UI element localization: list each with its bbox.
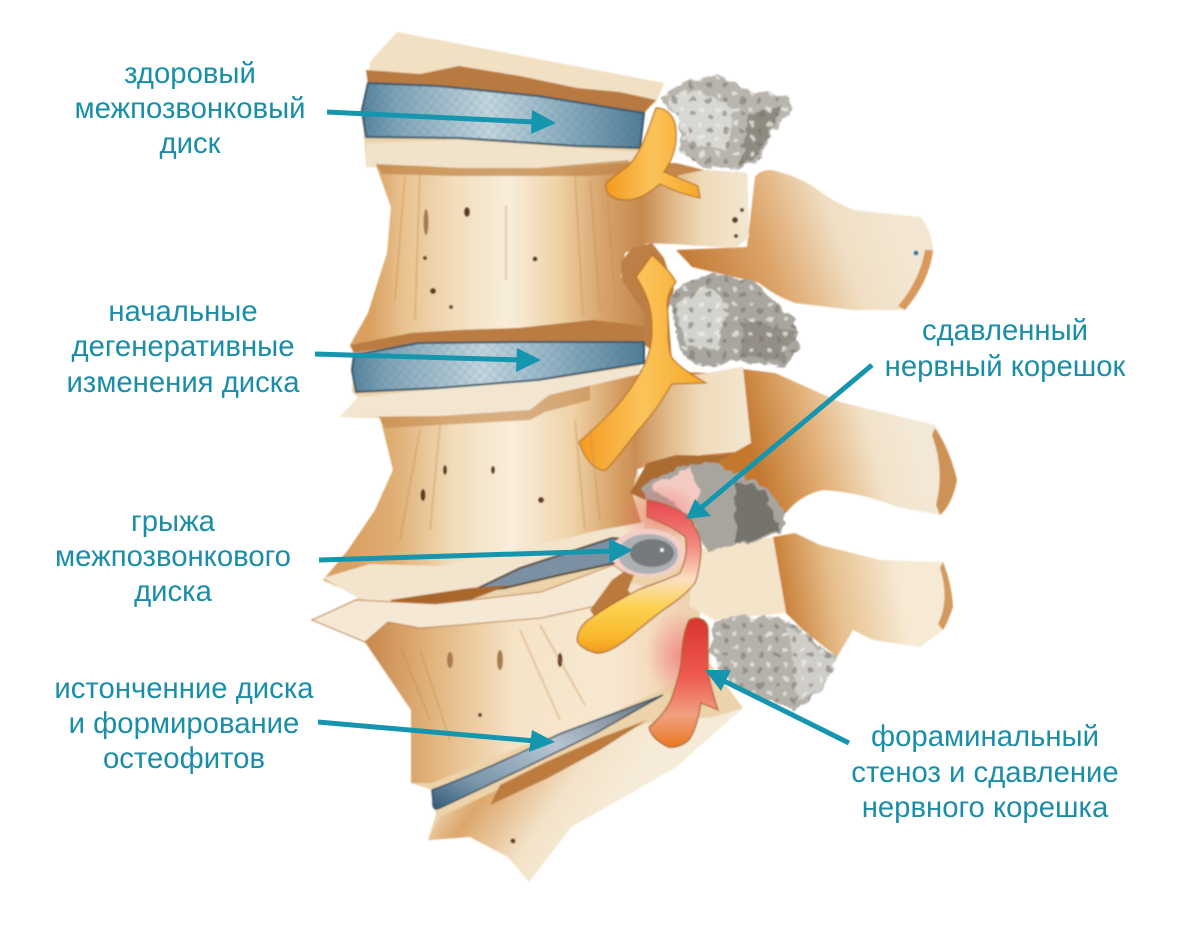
label: early degeneration: начальные [108, 295, 258, 328]
top vertebra fragment [368, 32, 664, 113]
label: disc thinning: и формирование [69, 707, 299, 740]
arch shadow under process [630, 452, 735, 500]
early degeneration disc [352, 342, 644, 392]
upper lip of second vertebra [366, 140, 640, 172]
transverse process: middle [700, 368, 957, 515]
label: hernia: межпозвонкового [55, 540, 291, 573]
label: foraminal stenosis: стеноз и сдавление [851, 756, 1119, 789]
stenosed nerve root [649, 618, 718, 747]
label: hernia: диска [134, 575, 213, 608]
label: healthy disc: здоровый [124, 57, 256, 90]
label: early degeneration: изменения диска [66, 366, 300, 399]
vertebra pores [420, 207, 918, 844]
top vertebra lower edge [366, 66, 656, 113]
transverse process: upper [676, 170, 933, 310]
fourth vertebra shadow [590, 560, 640, 625]
fourth vertebra lip [312, 565, 628, 642]
second vertebra pedicle [640, 170, 749, 248]
second vertebra top rim [376, 160, 640, 176]
third vertebra lip [340, 366, 640, 417]
label: compressed nerve root: сдавленный [922, 314, 1088, 347]
label: foraminal stenosis: нервного корешка [862, 791, 1109, 824]
label: hernia: грыжа [131, 505, 216, 538]
label: compressed nerve root: нервный корешок [885, 350, 1126, 383]
fourth vertebra process [689, 537, 786, 620]
spine illustration [312, 32, 957, 882]
arch behind second nerve root [621, 243, 674, 362]
label: healthy disc: диск [160, 127, 221, 160]
bottom vertebra rim [490, 720, 647, 805]
healthy disc [362, 83, 644, 148]
second vertebra lower rim [350, 320, 644, 353]
spine backing silhouette [312, 85, 743, 882]
label: foraminal stenosis: фораминальный [871, 720, 1099, 753]
inflammation glow [618, 483, 702, 547]
arrow: hernia [319, 539, 633, 563]
arrow: compressed nerve root [686, 365, 872, 519]
arrow: foraminal stenosis [705, 670, 849, 743]
thin disc with osteophytes [432, 695, 663, 809]
facet joint: upper [660, 75, 793, 170]
herniated disc bulge [611, 529, 685, 577]
transverse process: lower [773, 533, 953, 657]
label: early degeneration: дегенеративные [71, 330, 295, 363]
third vertebra body [323, 367, 751, 600]
second vertebra body [350, 163, 749, 345]
inflammation glow: foramen [646, 610, 714, 700]
herniated disc brown shadow [390, 585, 510, 607]
third vertebra process [630, 367, 751, 470]
fourth vertebra body [312, 577, 690, 783]
third vertebra top rim [378, 384, 590, 428]
arrow: healthy disc [327, 110, 556, 134]
label: disc thinning: истонченние диска [54, 672, 314, 705]
vertebra streaks [395, 170, 616, 740]
third vertebra lower lip [323, 522, 645, 605]
label: disc thinning: остеофитов [103, 742, 265, 775]
nerve root: upper [606, 108, 700, 200]
arrow: disc thinning [318, 722, 555, 752]
nerve root: second [579, 255, 706, 470]
facet joint: second [668, 273, 800, 368]
herniated disc tract [470, 538, 640, 592]
label: healthy disc: межпозвонковый [74, 92, 306, 125]
bottom vertebra [428, 708, 743, 882]
facet joint: third [642, 462, 786, 553]
compressed nerve root [577, 500, 701, 653]
arrow: early degeneration [315, 348, 541, 372]
facet joint: fourth [710, 615, 836, 710]
